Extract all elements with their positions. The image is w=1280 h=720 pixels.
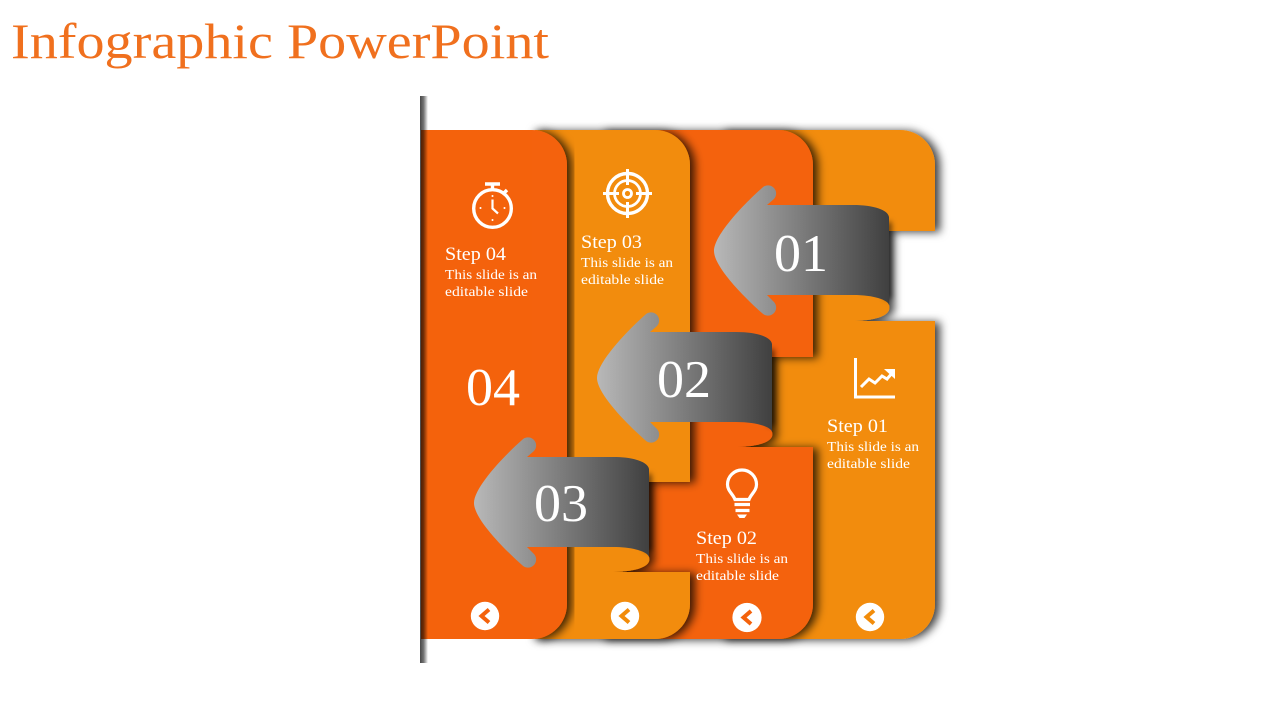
title: Infographic PowerPoint <box>11 13 549 69</box>
text: step 02: Step 02 <box>696 529 757 549</box>
text: step 03 <box>581 233 673 288</box>
arrow 03: 03 <box>534 475 588 533</box>
number 04: 04 <box>466 359 520 417</box>
text: step 02: This slide is an <box>696 552 788 567</box>
arrow 02 <box>597 312 772 443</box>
text: step 02 <box>696 529 788 584</box>
text: step 01: editable slide <box>827 457 910 472</box>
text: step 03: This slide is an <box>581 256 673 271</box>
arrow 01: 01 <box>774 225 828 283</box>
text: step 01 <box>827 417 919 472</box>
text: step 04: editable slide <box>445 285 528 300</box>
panel: step 03 background <box>535 130 690 639</box>
panel: step 01 background <box>720 130 935 639</box>
text: step 04: This slide is an <box>445 268 537 283</box>
text: step 03: Step 03 <box>581 233 642 253</box>
icon: back button 02 <box>732 603 762 632</box>
arrow 02: 02 <box>657 351 711 409</box>
text: step 04: Step 04 <box>445 245 506 265</box>
icon: back button 03 <box>611 602 639 630</box>
vertical line <box>420 96 428 663</box>
icon: light bulb <box>728 470 756 518</box>
icon: line chart <box>856 358 895 397</box>
panel: step 02 background <box>600 130 813 639</box>
panel: step 04 background <box>421 130 567 639</box>
icon: back button 04 <box>471 602 499 630</box>
text: step 01: Step 01 <box>827 417 888 437</box>
icon: back button 01 <box>856 603 884 631</box>
text: step 01: This slide is an <box>827 440 919 455</box>
text: step 03: editable slide <box>581 273 664 288</box>
arrow 03 <box>474 437 649 568</box>
text: step 02: editable slide <box>696 569 779 584</box>
arrow 01 <box>714 185 889 316</box>
text: step 04 <box>445 245 537 300</box>
icon: stopwatch <box>474 184 511 227</box>
icon: target <box>603 169 652 218</box>
